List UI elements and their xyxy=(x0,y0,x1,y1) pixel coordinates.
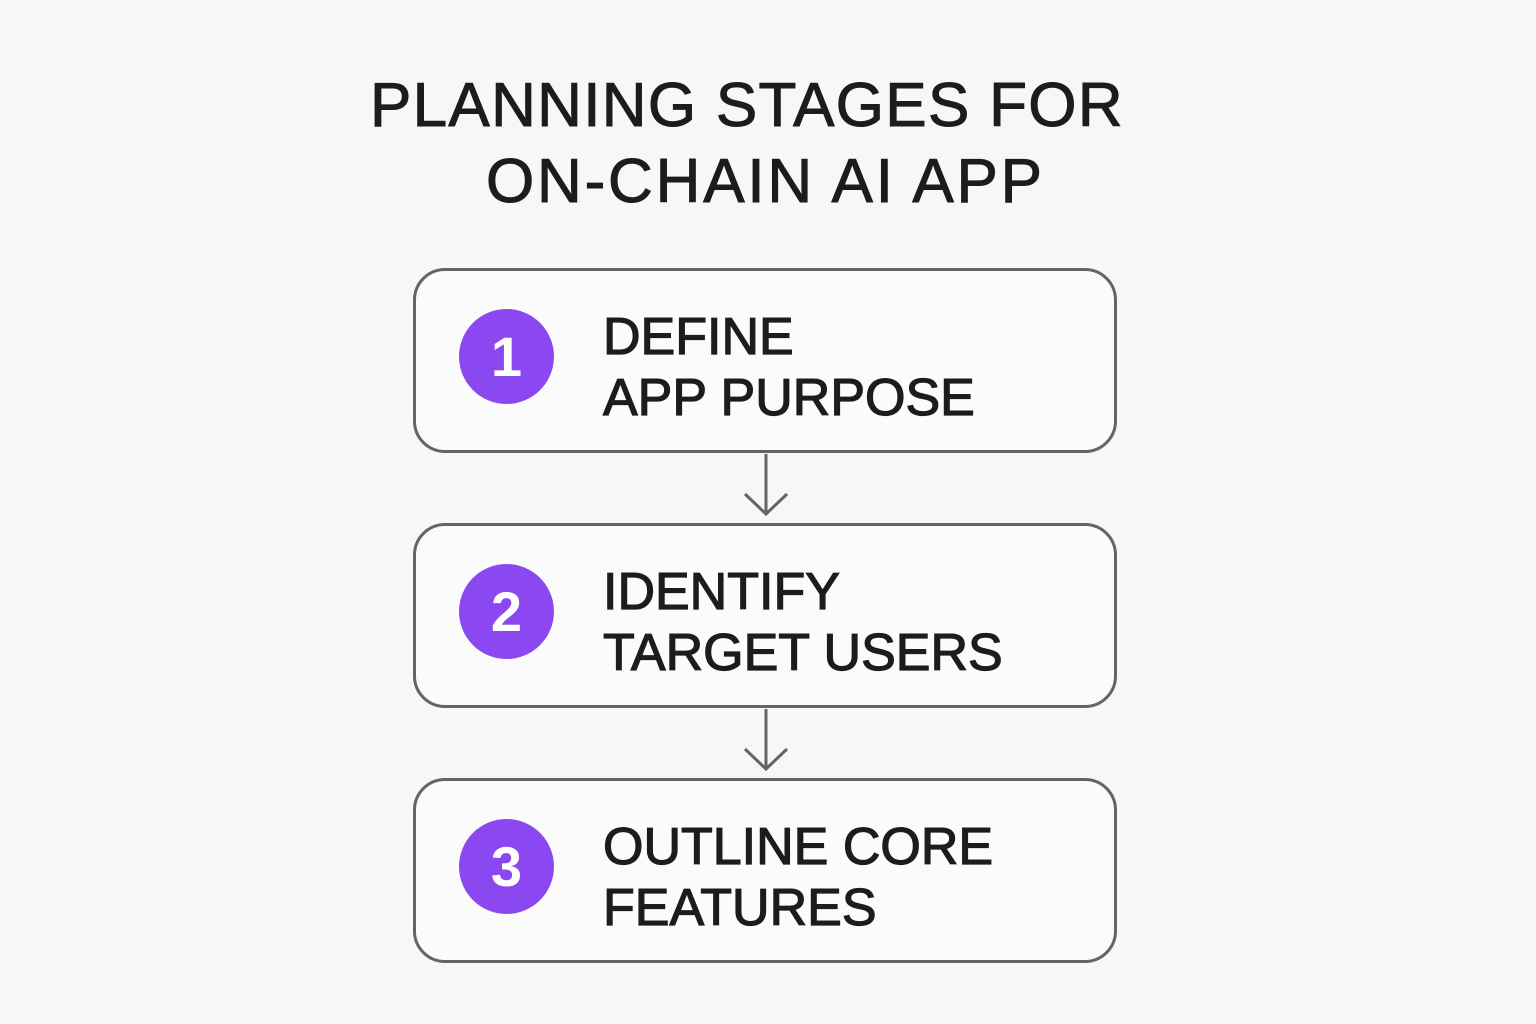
icon: number 2 circle xyxy=(459,564,554,659)
text: identify target users: IDENTIFY xyxy=(603,563,840,621)
arrow: step 1 to 2 xyxy=(744,454,788,516)
panel: step 3 xyxy=(413,778,1117,963)
title xyxy=(370,71,1124,216)
arrow: step 2 to 3 xyxy=(744,709,788,771)
title: PLANNING STAGES FOR xyxy=(370,71,1124,140)
panel: step 1 xyxy=(413,268,1117,453)
icon: number 3 circle: 3 xyxy=(491,835,522,898)
icon: number 1 circle xyxy=(459,309,554,404)
text: identify target users: TARGET USERS xyxy=(603,624,1003,682)
title: ON-CHAIN AI APP xyxy=(486,147,1045,216)
icon: number 3 circle xyxy=(459,819,554,914)
text: outline core features xyxy=(603,818,993,937)
icon: number 2 circle: 2 xyxy=(491,580,522,643)
icon: number 1 circle: 1 xyxy=(491,325,522,388)
text: define app purpose xyxy=(602,308,975,427)
text: outline core features: OUTLINE CORE xyxy=(603,818,993,876)
text: outline core features: FEATURES xyxy=(603,879,877,937)
text: define app purpose: APP PURPOSE xyxy=(603,369,975,427)
text: identify target users xyxy=(603,563,1003,682)
text: define app purpose: DEFINE xyxy=(603,308,794,366)
panel: step 2 xyxy=(413,523,1117,708)
